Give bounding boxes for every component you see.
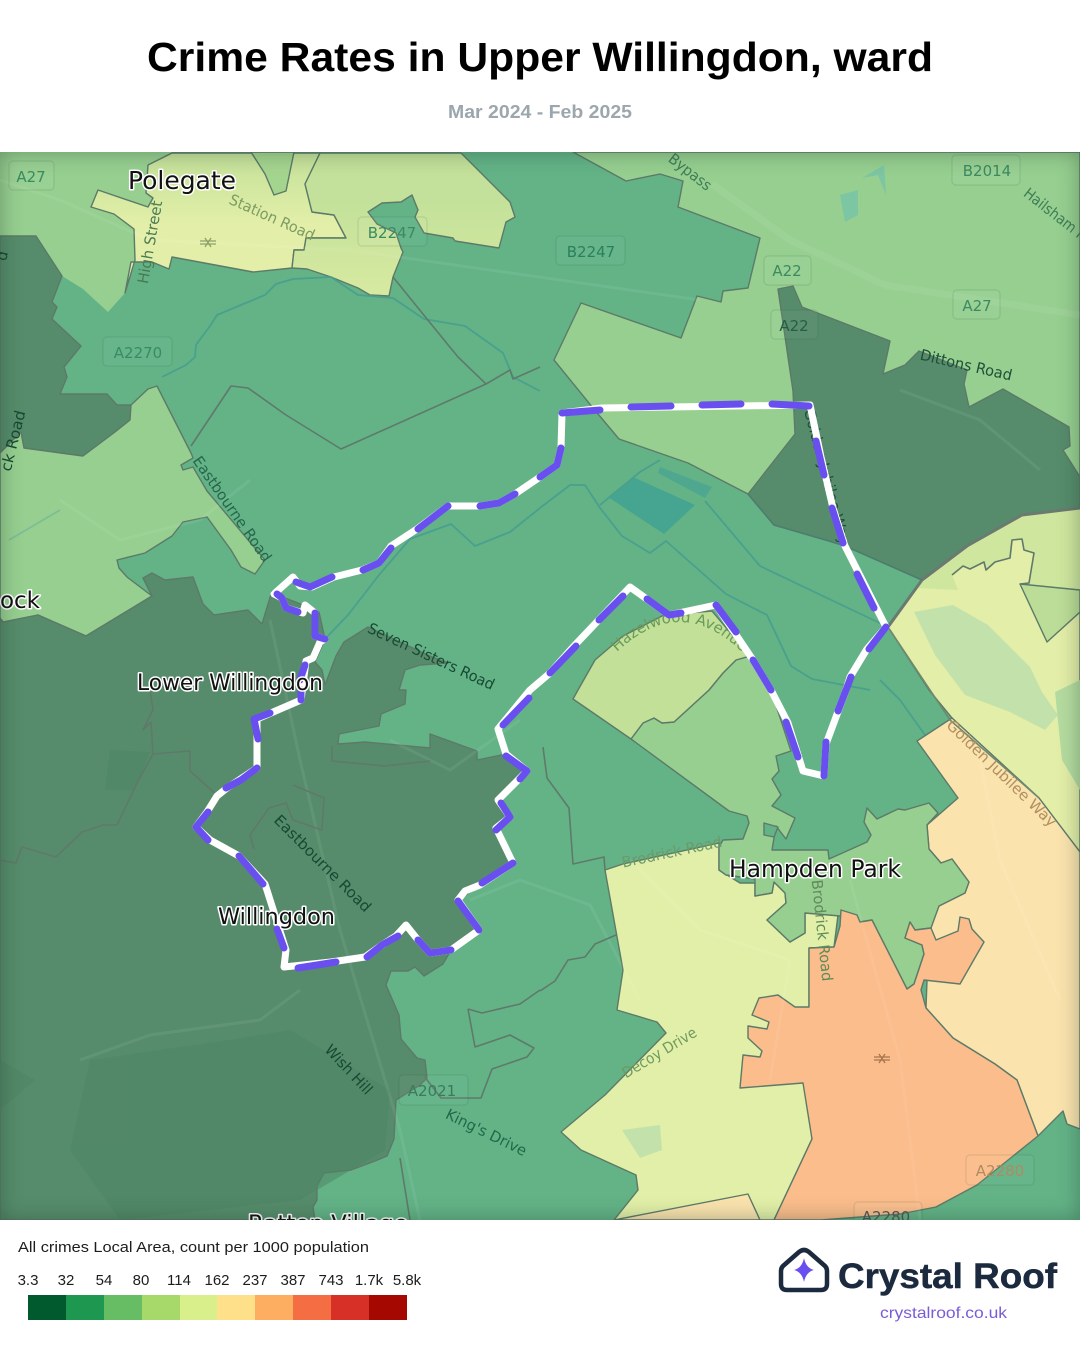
legend scale values: 5.8k bbox=[393, 1272, 422, 1289]
water: lakes and reservoirs bbox=[608, 165, 1080, 1158]
shield: A2270: A2270 bbox=[114, 344, 162, 362]
shield: A2280 east: A2280 bbox=[976, 1162, 1024, 1180]
shield: B2247 west: B2247 bbox=[368, 224, 416, 242]
icon: house with star bbox=[781, 1250, 827, 1290]
place name labels: Lower Willingdon bbox=[137, 671, 323, 696]
subtitle: date range: Mar 2024 - Feb 2025 bbox=[448, 102, 632, 122]
legend scale values: 32 bbox=[58, 1272, 74, 1289]
water: streams bbox=[9, 277, 925, 735]
legend scale values: 114 bbox=[167, 1272, 191, 1289]
legend scale values: 387 bbox=[280, 1272, 306, 1289]
place name labels: Hampden Park bbox=[729, 855, 901, 883]
shield: A27 east: A27 bbox=[962, 297, 992, 315]
road number shields bbox=[9, 155, 1034, 1232]
terrain: darker woodland patches bbox=[0, 750, 390, 1220]
ward outline: purple dashes bbox=[196, 404, 886, 968]
legend bbox=[18, 1239, 422, 1320]
legend scale values: 1.7k bbox=[355, 1272, 384, 1289]
logo: Crystal Roof bbox=[778, 1248, 1058, 1322]
shield: B2247 east: B2247 bbox=[567, 243, 615, 261]
place name labels bbox=[0, 166, 901, 1237]
ward outline: white bbox=[196, 405, 886, 967]
shield: A22 south: A22 bbox=[779, 317, 809, 335]
road name labels: King's Drive bbox=[443, 1105, 530, 1160]
shield: A2021 bbox=[399, 1075, 468, 1105]
shield: A2280 south bbox=[854, 1202, 922, 1232]
title: Crime Rates in Upper Willingdon, ward bbox=[147, 34, 933, 80]
legend scale values: 743 bbox=[318, 1272, 344, 1289]
shield: B2014 bbox=[952, 155, 1020, 185]
road name labels: Brodrick Road bbox=[620, 833, 724, 872]
shield: A2280 east bbox=[966, 1155, 1034, 1185]
shield: A27 west bbox=[9, 161, 54, 190]
road name labels: Eastbourne Road bbox=[270, 811, 375, 916]
boundaries: thin ward and district lines bbox=[0, 277, 1080, 1220]
areas: crime rate choropleth polygons bbox=[0, 152, 1080, 1220]
legend title: All crimes Local Area, count per 1000 population bbox=[18, 1239, 369, 1256]
shield: A22 south bbox=[771, 310, 818, 339]
legend scale values: 162 bbox=[204, 1272, 230, 1289]
map base area bbox=[0, 152, 1080, 1220]
legend scale values: 54 bbox=[96, 1272, 112, 1289]
shield: B2247 west bbox=[358, 217, 427, 246]
road name labels: Hazelwood Avenue bbox=[610, 614, 742, 651]
road name labels: Eastbourne Road bbox=[189, 453, 275, 565]
shield: A22 north bbox=[764, 256, 811, 285]
ward boundary: Upper Willingdon bbox=[196, 404, 886, 968]
road name labels: High Street bbox=[134, 199, 166, 285]
road name labels: Wish Hill bbox=[321, 1041, 376, 1098]
shield: A2270 bbox=[103, 337, 172, 366]
place name labels: ock bbox=[0, 588, 41, 614]
shield: B2247 east bbox=[556, 236, 625, 265]
road name labels bbox=[0, 152, 1080, 1160]
road name labels: Seven Sisters Road bbox=[365, 619, 497, 694]
shield: A27 west: A27 bbox=[16, 168, 46, 186]
website url: crystalroof.co.uk bbox=[880, 1305, 1008, 1322]
legend colour bar bbox=[28, 1295, 407, 1320]
legend scale values: 237 bbox=[242, 1272, 268, 1289]
legend scale values: 3.3 bbox=[18, 1272, 38, 1289]
wordmark: Crystal Roof bbox=[838, 1257, 1057, 1296]
choropleth map bbox=[0, 152, 1080, 1220]
roads: faint street network bbox=[0, 180, 1080, 1220]
map edge vignette bbox=[0, 152, 1080, 1220]
place name labels: Polegate bbox=[128, 166, 236, 195]
railway station symbols bbox=[200, 238, 890, 1063]
legend scale values bbox=[18, 1272, 422, 1289]
shield: A22 north: A22 bbox=[772, 262, 802, 280]
road name labels: Decoy Drive bbox=[619, 1023, 700, 1082]
road name labels: Brodrick Road bbox=[808, 879, 836, 982]
shield: A2021: A2021 bbox=[408, 1082, 456, 1100]
shield: A27 east bbox=[953, 290, 1000, 319]
road name labels: Dittons Road bbox=[918, 346, 1014, 384]
place name labels: Willingdon bbox=[218, 905, 335, 930]
legend scale values: 80 bbox=[133, 1272, 149, 1289]
road name labels: Golden Jubilee Way bbox=[943, 716, 1060, 831]
road name labels: Station Road bbox=[226, 191, 318, 244]
shield: B2014: B2014 bbox=[963, 162, 1011, 180]
road name labels: Golden Jubilee Way bbox=[800, 407, 854, 547]
